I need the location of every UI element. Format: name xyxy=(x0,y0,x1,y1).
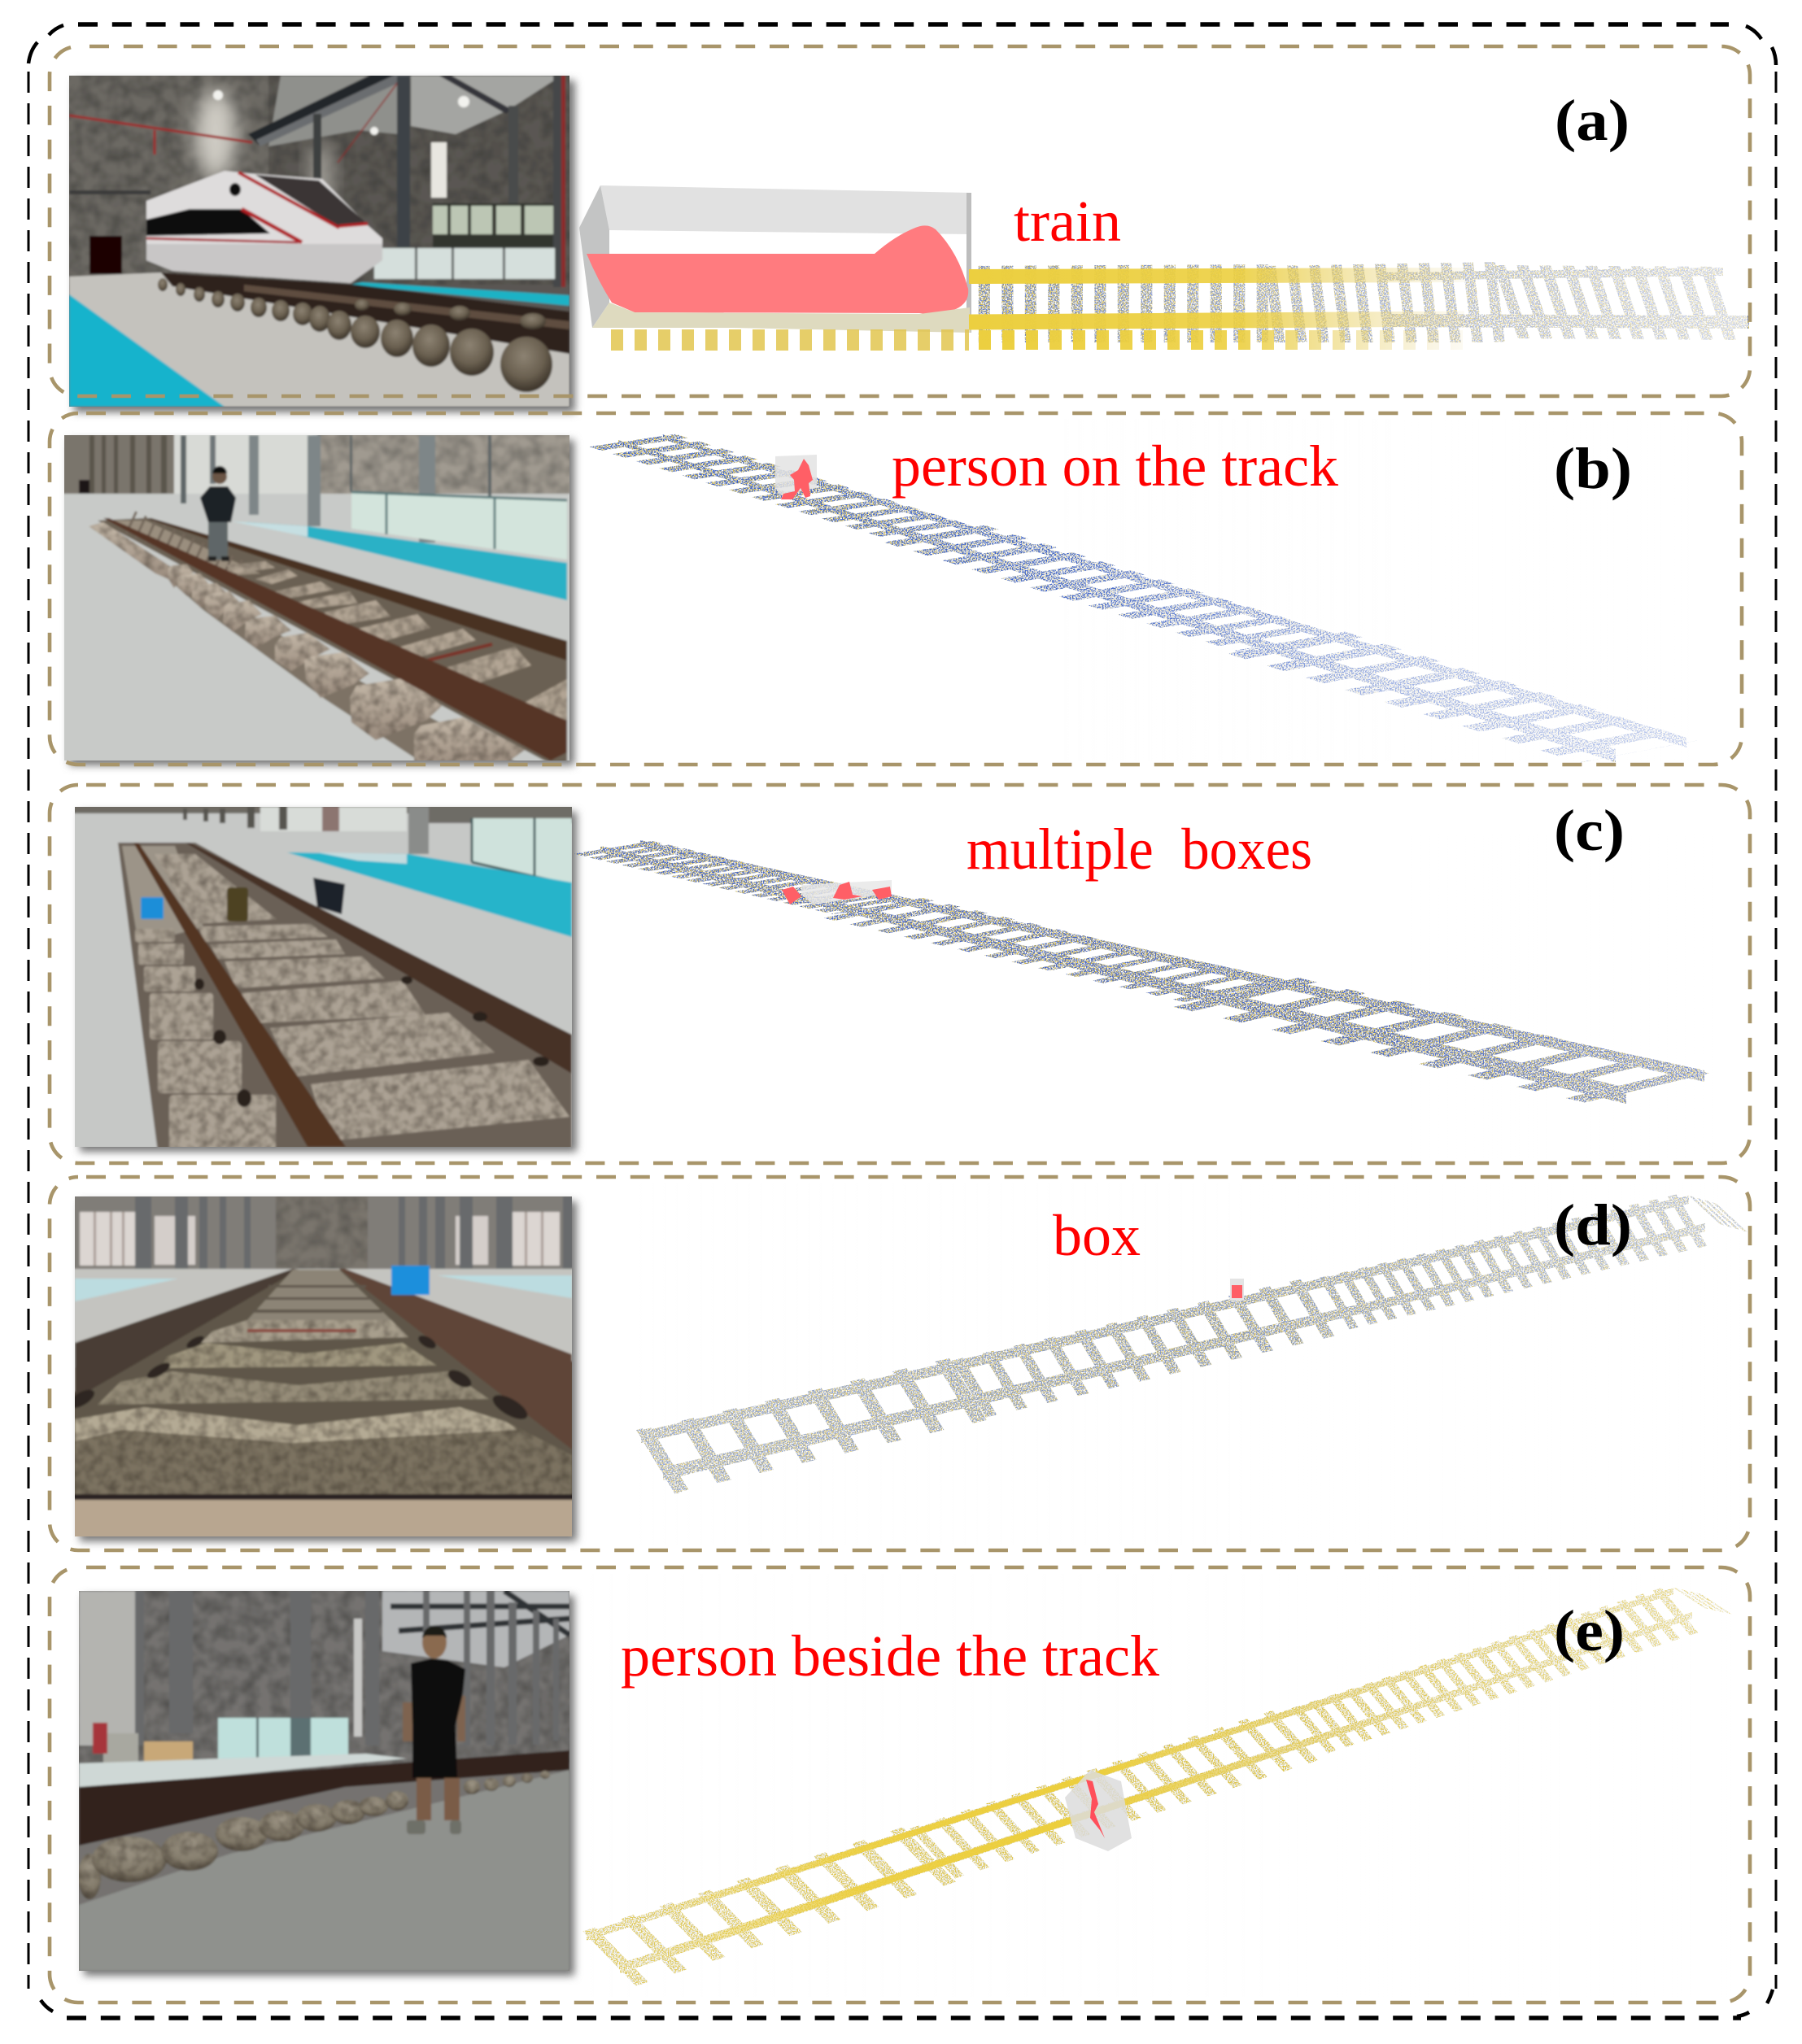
track point cloud c xyxy=(582,834,1746,1159)
panel e: person beside the track xyxy=(50,1567,1750,2003)
tag (a): (a) xyxy=(1555,88,1630,153)
label: person on the track: person on the track xyxy=(892,434,1338,499)
track point cloud b xyxy=(586,419,1737,762)
label: multiple boxes: multiple boxes xyxy=(966,817,1312,882)
photo shadow c xyxy=(80,812,577,1152)
border c xyxy=(50,785,1750,1163)
photo: boxes on the track xyxy=(75,807,572,1147)
photo: train on track xyxy=(69,76,569,407)
label: train: train xyxy=(1014,189,1121,254)
photo: person beside track xyxy=(79,1591,569,1971)
panel d: box xyxy=(50,1177,1750,1550)
detection boxes: multiple boxes xyxy=(782,880,892,904)
track point cloud e xyxy=(582,1574,1746,1997)
tag (d): (d) xyxy=(1554,1192,1632,1257)
panel a: train xyxy=(50,46,1750,423)
panel b: person on the track xyxy=(49,413,1742,773)
border d xyxy=(50,1177,1750,1550)
tag (b): (b) xyxy=(1554,436,1632,501)
border b xyxy=(50,413,1742,765)
train point cloud with bounding box xyxy=(579,185,971,333)
photo shadow d xyxy=(80,1201,577,1541)
border e xyxy=(50,1567,1750,2003)
track point cloud d xyxy=(582,1183,1746,1545)
photo shadow b xyxy=(69,440,574,765)
photo shadow e xyxy=(84,1596,574,1976)
tag (e): (e) xyxy=(1554,1598,1625,1663)
photo shadow a xyxy=(74,81,575,412)
detection box: person beside track xyxy=(1065,1770,1132,1851)
border a xyxy=(50,46,1750,396)
detection box: box xyxy=(1230,1279,1244,1301)
label: person beside the track: person beside the track xyxy=(621,1623,1159,1689)
tag (c): (c) xyxy=(1554,798,1625,863)
photo: person standing on track xyxy=(64,435,569,761)
detection box: person on track xyxy=(775,455,817,499)
label: box: box xyxy=(1053,1203,1141,1268)
photo: box beside rail, view along track xyxy=(75,1196,572,1536)
track point cloud a xyxy=(611,256,1749,358)
panel c: multiple boxes xyxy=(50,785,1750,1163)
